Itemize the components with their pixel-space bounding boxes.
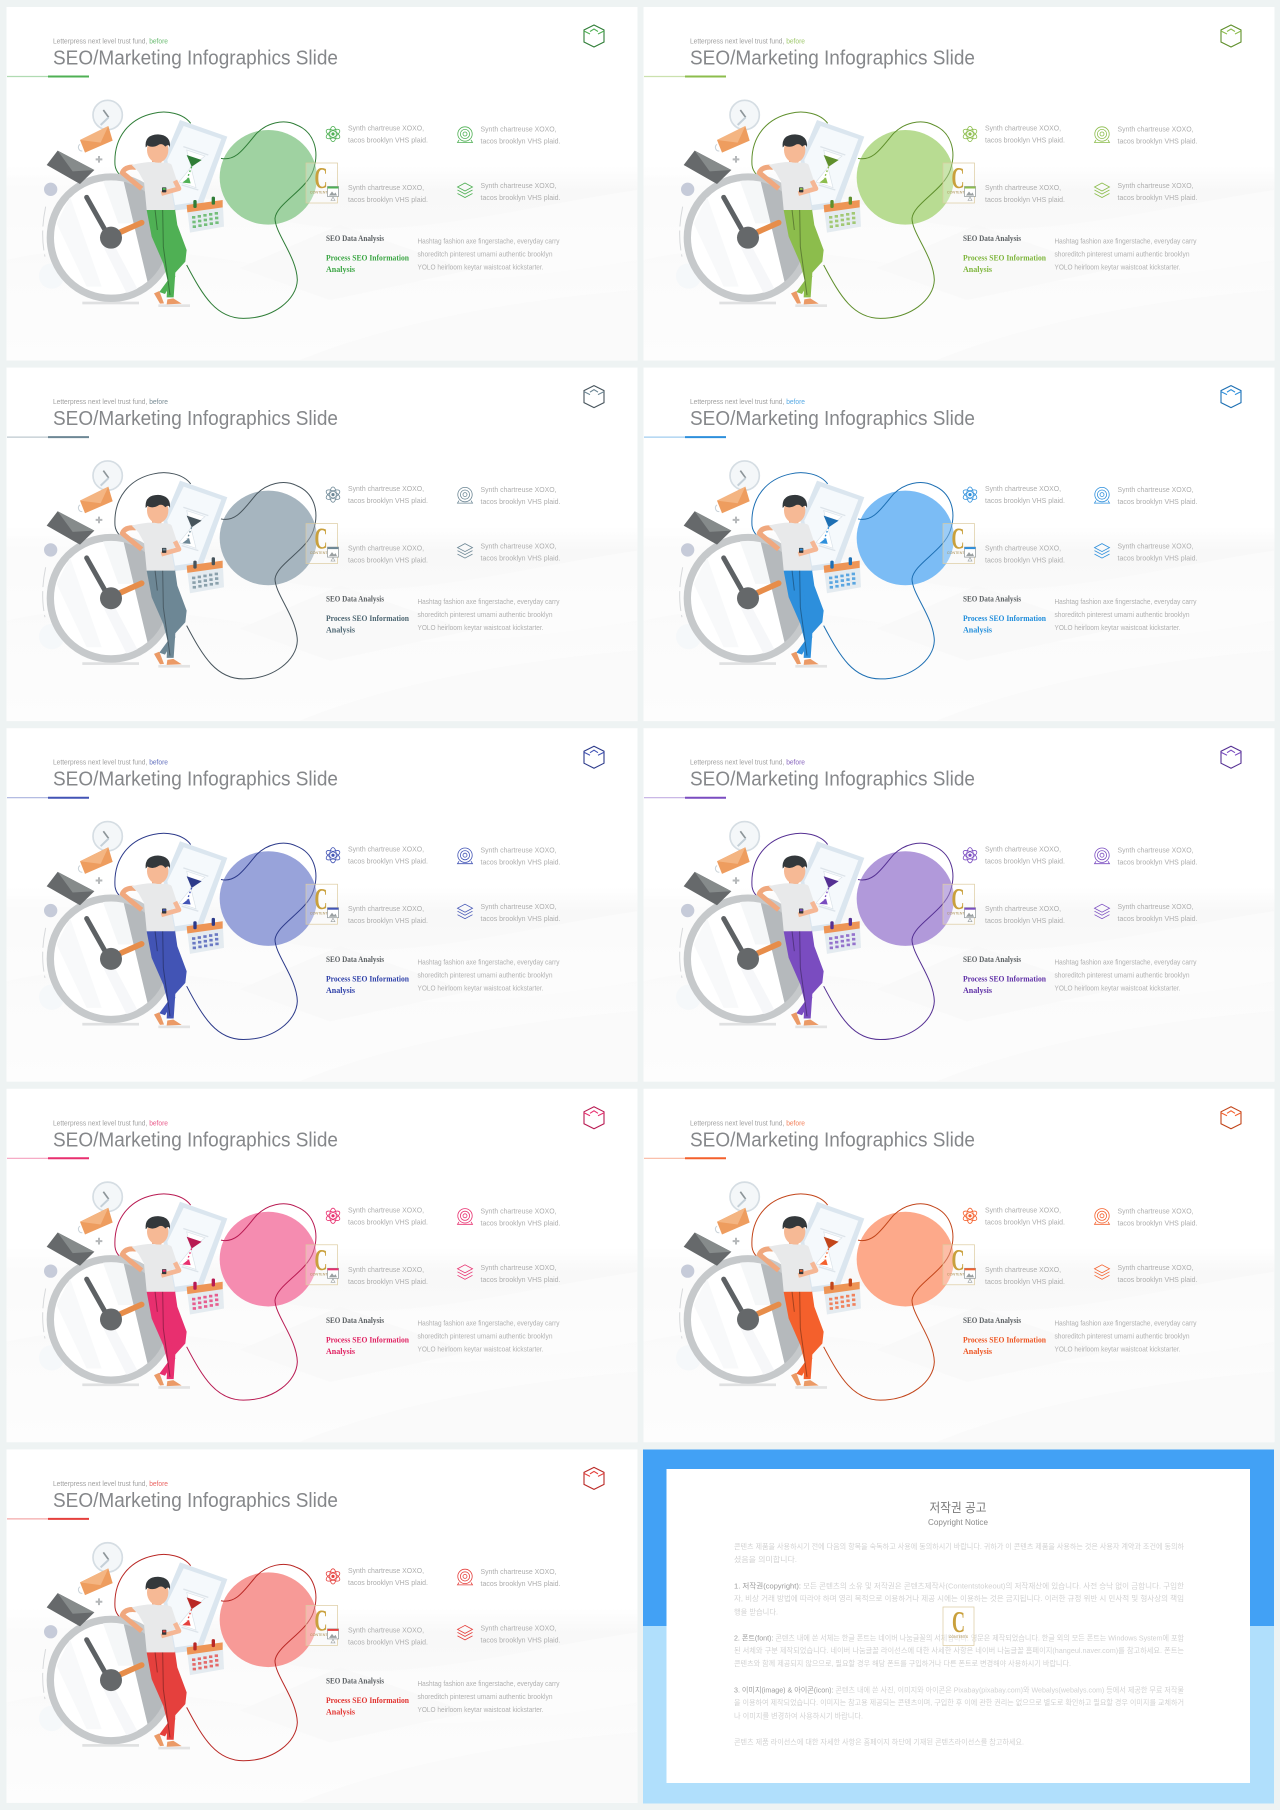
- watermark: [306, 881, 338, 924]
- heading: Process SEO Information: Analysis: [326, 986, 355, 995]
- eyebrow text: Letterpress next level trust fund, before: [690, 758, 805, 767]
- feature text 1: tacos brooklyn VHS plaid.: [348, 136, 428, 144]
- notice title: 저작권 공고: [930, 1501, 986, 1515]
- panel: lime slide: [644, 7, 1274, 360]
- watermark: C: [314, 881, 328, 916]
- heading: Process SEO Information: Analysis: [326, 626, 355, 635]
- feature text 4: Synth chartreuse XOXO,: [1118, 902, 1194, 911]
- title underline: [644, 1157, 726, 1159]
- feature text 4: tacos brooklyn VHS plaid.: [1118, 193, 1198, 202]
- paragraph: Hashtag fashion axe fingerstache, everyday carry: [418, 1318, 560, 1327]
- feature text 2: Synth chartreuse XOXO,: [480, 1206, 556, 1215]
- feature text 3: tacos brooklyn VHS plaid.: [348, 195, 428, 204]
- eyebrow text: Letterpress next level trust fund, before: [53, 397, 168, 406]
- heading: Process SEO Information: Process SEO Information: [326, 1696, 410, 1705]
- icon: atom: [325, 848, 341, 863]
- feature text 1: tacos brooklyn VHS plaid.: [985, 1217, 1065, 1226]
- icon: box logo: [584, 1467, 604, 1489]
- feature text 2: tacos brooklyn VHS plaid.: [480, 1218, 560, 1227]
- illustration: man with stopwatch: [676, 461, 954, 679]
- eyebrow text: Letterpress next level trust fund, before: [53, 758, 168, 767]
- watermark: CONTENTS: [310, 190, 331, 194]
- icon: image: [964, 547, 976, 561]
- panel: purple slide: [644, 728, 1274, 1082]
- title: SEO/Marketing Infographics Slide: [690, 1128, 975, 1151]
- feature text 1: Synth chartreuse XOXO,: [985, 124, 1061, 132]
- icon: image: [964, 186, 976, 200]
- watermark: C: [952, 1242, 964, 1277]
- icon: layers: [1094, 904, 1110, 919]
- icon: box logo: [584, 25, 604, 47]
- paragraph: Hashtag fashion axe fingerstache, everyday carry: [418, 958, 560, 967]
- watermark: CONTENTS: [947, 190, 968, 194]
- paragraph: shoreditch pinterest umami authentic brooklyn: [1054, 610, 1190, 619]
- paragraph: shoreditch pinterest umami authentic brooklyn: [1054, 250, 1190, 258]
- feature text 2: tacos brooklyn VHS plaid.: [480, 1579, 560, 1588]
- heading: Process SEO Information: Analysis: [963, 626, 992, 635]
- paragraph: shoreditch pinterest umami authentic brooklyn: [418, 971, 552, 980]
- icon: image: [328, 547, 338, 561]
- watermark: C: [314, 1602, 328, 1637]
- feature text 2: Synth chartreuse XOXO,: [1118, 846, 1194, 855]
- feature text 4: tacos brooklyn VHS plaid.: [480, 1635, 560, 1644]
- watermark: C: [952, 160, 964, 195]
- heading: Process SEO Information: Process SEO Information: [326, 614, 410, 623]
- icon: atom: [962, 487, 978, 502]
- paragraph: shoreditch pinterest umami authentic brooklyn: [418, 250, 552, 258]
- icon: target: [458, 848, 472, 864]
- watermark: [943, 1242, 974, 1285]
- title: SEO/Marketing Infographics Slide: [53, 46, 338, 70]
- illustration: man with stopwatch: [39, 461, 317, 679]
- heading: Process SEO Information: Analysis: [326, 265, 355, 274]
- title: SEO/Marketing Infographics Slide: [53, 768, 338, 791]
- watermark: [306, 1602, 338, 1645]
- icon: layers: [458, 1265, 472, 1279]
- panel: indigo slide: [6, 728, 638, 1082]
- panel: red slide: [6, 1449, 638, 1803]
- heading: Process SEO Information: Analysis: [963, 986, 992, 995]
- watermark: [306, 160, 338, 203]
- feature text 3: Synth chartreuse XOXO,: [348, 544, 424, 553]
- feature text 3: Synth chartreuse XOXO,: [348, 1265, 424, 1274]
- feature text 2: tacos brooklyn VHS plaid.: [480, 858, 560, 867]
- icon: atom: [325, 487, 341, 502]
- paragraph: Hashtag fashion axe fingerstache, everyday carry: [1054, 958, 1197, 967]
- heading: Process SEO Information: Analysis: [963, 1347, 992, 1356]
- icon: image: [964, 908, 976, 922]
- eyebrow text: Letterpress next level trust fund, before: [690, 397, 805, 406]
- watermark: CONTENTS: [310, 912, 331, 916]
- icon: layers: [1094, 544, 1110, 558]
- feature text 3: tacos brooklyn VHS plaid.: [985, 1277, 1065, 1286]
- watermark: [943, 160, 974, 203]
- heading: SEO Data Analysis: SEO Data Analysis: [326, 1316, 384, 1325]
- panel: copyright notice: [643, 1450, 1274, 1804]
- feature text 4: Synth chartreuse XOXO,: [480, 902, 556, 911]
- heading: SEO Data Analysis: SEO Data Analysis: [326, 955, 384, 964]
- icon: atom: [325, 1569, 341, 1584]
- paragraph: Hashtag fashion axe fingerstache, everyday carry: [1054, 597, 1197, 606]
- icon: box logo: [584, 1107, 604, 1129]
- heading: SEO Data Analysis: SEO Data Analysis: [963, 234, 1021, 243]
- feature text 1: tacos brooklyn VHS plaid.: [985, 136, 1065, 144]
- panel: blue slide: [644, 368, 1274, 721]
- feature text 1: Synth chartreuse XOXO,: [985, 1205, 1061, 1214]
- icon: image: [328, 1268, 338, 1282]
- icon: atom: [962, 1208, 978, 1223]
- heading: Process SEO Information: Process SEO Information: [963, 975, 1047, 984]
- paragraph: YOLO heirloom keytar waistcoat kickstarter.: [1054, 1344, 1180, 1353]
- feature text 1: tacos brooklyn VHS plaid.: [348, 1578, 428, 1587]
- feature text 3: Synth chartreuse XOXO,: [348, 1625, 424, 1634]
- watermark: C: [952, 521, 964, 556]
- notice section 1: 자, 비상 거래 방법에 따라야 하며 영리 목적으로 이용하거나 제공 시에는 이용하는 것은 금지됩니다. 이러한 규정 위반 시 민사적 및 형사상의 책임: [734, 1593, 1184, 1603]
- title underline: [7, 1518, 89, 1520]
- heading: Process SEO Information: Process SEO Information: [963, 614, 1047, 623]
- feature text 4: Synth chartreuse XOXO,: [480, 1263, 556, 1272]
- paragraph: Hashtag fashion axe fingerstache, everyday carry: [1054, 1318, 1197, 1327]
- heading: SEO Data Analysis: SEO Data Analysis: [963, 595, 1021, 604]
- feature text 3: Synth chartreuse XOXO,: [985, 1265, 1061, 1274]
- icon: atom: [325, 1208, 341, 1223]
- watermark: [943, 881, 974, 924]
- feature text 1: tacos brooklyn VHS plaid.: [985, 496, 1065, 505]
- heading: Process SEO Information: Process SEO Information: [326, 975, 410, 984]
- title underline: [7, 436, 89, 438]
- feature text 1: tacos brooklyn VHS plaid.: [348, 857, 428, 866]
- icon: image: [328, 186, 338, 200]
- paragraph: shoreditch pinterest umami authentic brooklyn: [418, 1331, 552, 1340]
- eyebrow text: Letterpress next level trust fund, before: [690, 36, 805, 46]
- feature text 3: tacos brooklyn VHS plaid.: [985, 916, 1065, 925]
- panel: pink slide: [6, 1089, 638, 1442]
- feature text 4: Synth chartreuse XOXO,: [480, 542, 556, 551]
- feature text 1: tacos brooklyn VHS plaid.: [985, 857, 1065, 866]
- feature text 2: Synth chartreuse XOXO,: [1118, 485, 1194, 494]
- icon: target: [458, 1569, 472, 1585]
- watermark: CONTENTS: [310, 1633, 331, 1637]
- feature text 3: tacos brooklyn VHS plaid.: [985, 556, 1065, 565]
- notice intro: 콘텐츠 제품을 사용하시기 전에 다음의 항목을 숙독하고 사용에 동의하시기 바랍니다. 귀하가 이 콘텐츠 제품을 사용하는 것은 사용자 계약과 조건에 동의하: [734, 1541, 1184, 1551]
- feature text 2: tacos brooklyn VHS plaid.: [480, 136, 560, 146]
- icon: layers: [458, 544, 472, 558]
- watermark: CONTENTS: [947, 1272, 968, 1276]
- heading: Process SEO Information: Process SEO Information: [326, 254, 410, 262]
- icon: layers: [458, 1625, 472, 1640]
- paragraph: YOLO heirloom keytar waistcoat kickstarter.: [1054, 984, 1180, 993]
- paragraph: YOLO heirloom keytar waistcoat kickstarter.: [418, 623, 544, 632]
- feature text 4: tacos brooklyn VHS plaid.: [480, 914, 560, 923]
- title underline: [644, 436, 726, 438]
- illustration: man with stopwatch: [676, 1182, 954, 1400]
- notice section 2: 2. 폰트(font): 콘텐츠 내에 쓴 서체는 한글 폰트는 네이버 나눔글꼴의 서체입니다. 영문은 제작되었습니다. 한글 외의 모든 폰트는 Windows System에 포함: [734, 1634, 1209, 1642]
- watermark: C: [952, 1604, 965, 1639]
- title underline: [7, 797, 89, 799]
- icon: target: [1094, 487, 1110, 503]
- illustration: man with stopwatch: [676, 822, 954, 1040]
- watermark: CONTENTS: [947, 551, 968, 555]
- feature text 2: tacos brooklyn VHS plaid.: [480, 497, 560, 506]
- watermark: [943, 1604, 974, 1646]
- notice section 2: 된 서체와 구분 제작되었습니다. 네이버 나눔글꼴 라이선스에 대한 사세한 사항은 네이버 나눔글꼴 홈페이지(hangeul.naver.com)를 참고하세요. 폰트는: [734, 1645, 1184, 1655]
- feature text 3: Synth chartreuse XOXO,: [985, 904, 1061, 913]
- notice section 2: 콘텐츠와 함께 제공되지 않으므로, 필요할 경우 해당 폰트를 구입하거나 다른 폰트로 변경해야 사용하시기 바랍니다.: [734, 1658, 1071, 1668]
- feature text 4: Synth chartreuse XOXO,: [1118, 542, 1194, 551]
- eyebrow text: Letterpress next level trust fund, before: [53, 36, 168, 46]
- panel: slate slide: [6, 368, 638, 721]
- icon: box logo: [1221, 746, 1241, 768]
- feature text 3: tacos brooklyn VHS plaid.: [348, 1637, 428, 1646]
- eyebrow text: Letterpress next level trust fund, before: [53, 1118, 168, 1127]
- paragraph: shoreditch pinterest umami authentic brooklyn: [1054, 971, 1190, 980]
- feature text 1: tacos brooklyn VHS plaid.: [348, 1217, 428, 1226]
- paragraph: YOLO heirloom keytar waistcoat kickstarter.: [418, 984, 544, 993]
- watermark: [943, 521, 974, 564]
- icon: target: [458, 127, 472, 142]
- eyebrow text: Letterpress next level trust fund, before: [53, 1479, 168, 1488]
- feature text 3: tacos brooklyn VHS plaid.: [985, 195, 1065, 204]
- feature text 4: Synth chartreuse XOXO,: [480, 181, 556, 190]
- notice section 3: 을 이용하여 제작되었습니다. 이미지는 참고용 제공되는 콘텐츠이며, 구입한 후 이에 관한 권리는 없으므로 별도로 확인하고 필요할 경우 이미지를 교체하거: [734, 1697, 1184, 1707]
- paragraph: shoreditch pinterest umami authentic brooklyn: [418, 610, 552, 619]
- feature text 4: Synth chartreuse XOXO,: [1118, 1263, 1194, 1272]
- heading: Process SEO Information: Analysis: [326, 1347, 355, 1356]
- feature text 1: Synth chartreuse XOXO,: [348, 124, 424, 132]
- paragraph: YOLO heirloom keytar waistcoat kickstarter.: [418, 1705, 544, 1714]
- title: SEO/Marketing Infographics Slide: [690, 407, 975, 430]
- watermark: CONTENTS: [949, 1635, 969, 1639]
- eyebrow text: Letterpress next level trust fund, before: [690, 1118, 805, 1127]
- feature text 4: tacos brooklyn VHS plaid.: [480, 554, 560, 563]
- title: SEO/Marketing Infographics Slide: [53, 407, 338, 430]
- feature text 1: Synth chartreuse XOXO,: [985, 845, 1061, 854]
- illustration: man with stopwatch: [39, 100, 317, 318]
- feature text 3: Synth chartreuse XOXO,: [348, 904, 424, 913]
- feature text 4: tacos brooklyn VHS plaid.: [480, 1275, 560, 1284]
- heading: Process SEO Information: Process SEO Information: [963, 254, 1047, 262]
- title underline: [7, 1157, 89, 1159]
- notice subtitle: Copyright Notice: [928, 1518, 989, 1527]
- watermark: [306, 521, 338, 564]
- watermark: [306, 1242, 338, 1285]
- feature text 1: Synth chartreuse XOXO,: [348, 484, 424, 493]
- paragraph: Hashtag fashion axe fingerstache, everyday carry: [1054, 236, 1197, 246]
- illustration: man with stopwatch: [676, 100, 954, 318]
- watermark: C: [314, 160, 328, 195]
- notice section 1: 1. 저작권(copyright): 모든 콘텐츠의 소유 및 저작권은 콘텐츠제작사(Contentstokeout)의 저작재산에 있습니다. 사전 승낙 없이 금합니다. 구입한: [734, 1582, 1182, 1590]
- paragraph: Hashtag fashion axe fingerstache, everyday carry: [418, 1679, 560, 1688]
- feature text 1: Synth chartreuse XOXO,: [348, 1205, 424, 1214]
- feature text 2: tacos brooklyn VHS plaid.: [1118, 1218, 1198, 1227]
- feature text 3: Synth chartreuse XOXO,: [985, 544, 1061, 553]
- panel: green slide: [6, 7, 638, 360]
- paragraph: YOLO heirloom keytar waistcoat kickstarter.: [418, 1344, 544, 1353]
- feature text 4: tacos brooklyn VHS plaid.: [1118, 914, 1198, 923]
- heading: Process SEO Information: Process SEO Information: [963, 1335, 1047, 1344]
- feature text 1: tacos brooklyn VHS plaid.: [348, 496, 428, 505]
- heading: Process SEO Information: Process SEO Information: [326, 1335, 410, 1344]
- icon: layers: [458, 904, 472, 919]
- heading: SEO Data Analysis: SEO Data Analysis: [963, 955, 1021, 964]
- feature text 3: tacos brooklyn VHS plaid.: [348, 1277, 428, 1286]
- feature text 3: tacos brooklyn VHS plaid.: [348, 916, 428, 925]
- icon: image: [328, 908, 338, 922]
- feature text 1: Synth chartreuse XOXO,: [348, 1566, 424, 1575]
- feature text 2: Synth chartreuse XOXO,: [480, 124, 556, 134]
- paragraph: YOLO heirloom keytar waistcoat kickstarter.: [1054, 623, 1180, 632]
- feature text 1: Synth chartreuse XOXO,: [348, 845, 424, 854]
- feature text 4: tacos brooklyn VHS plaid.: [1118, 554, 1198, 563]
- icon: atom: [325, 126, 341, 142]
- icon: box logo: [1221, 25, 1241, 47]
- paragraph: Hashtag fashion axe fingerstache, everyday carry: [418, 597, 560, 606]
- feature text 2: tacos brooklyn VHS plaid.: [1118, 858, 1198, 867]
- watermark: CONTENTS: [310, 1272, 331, 1276]
- heading: SEO Data Analysis: SEO Data Analysis: [326, 595, 384, 604]
- title underline: [644, 797, 726, 799]
- panel: orange slide: [644, 1089, 1274, 1442]
- icon: layers: [458, 183, 472, 198]
- icon: target: [1094, 127, 1110, 142]
- illustration: man with stopwatch: [39, 822, 317, 1040]
- feature text 2: Synth chartreuse XOXO,: [1118, 124, 1194, 134]
- paragraph: YOLO heirloom keytar waistcoat kickstarter.: [418, 262, 544, 272]
- feature text 2: Synth chartreuse XOXO,: [480, 1567, 556, 1576]
- heading: SEO Data Analysis: SEO Data Analysis: [326, 1676, 384, 1685]
- notice footer: 콘텐츠 제품 라이선스에 대한 자세한 사항은 홈페이지 하단에 기재된 콘텐츠라이선스를 참고하세요.: [734, 1736, 1024, 1746]
- feature text 4: Synth chartreuse XOXO,: [1118, 181, 1194, 190]
- feature text 2: tacos brooklyn VHS plaid.: [1118, 497, 1198, 506]
- icon: box logo: [584, 386, 604, 408]
- title underline: [7, 76, 89, 78]
- heading: Process SEO Information: Analysis: [326, 1707, 355, 1716]
- icon: layers: [1094, 1265, 1110, 1279]
- feature text 2: tacos brooklyn VHS plaid.: [1118, 136, 1198, 146]
- icon: target: [458, 487, 472, 503]
- title: SEO/Marketing Infographics Slide: [53, 1489, 338, 1512]
- title: SEO/Marketing Infographics Slide: [690, 768, 975, 791]
- feature text 2: Synth chartreuse XOXO,: [480, 846, 556, 855]
- feature text 4: tacos brooklyn VHS plaid.: [1118, 1275, 1198, 1284]
- paragraph: Hashtag fashion axe fingerstache, everyday carry: [418, 236, 560, 246]
- watermark: C: [314, 521, 328, 556]
- heading: Process SEO Information: Analysis: [963, 265, 992, 274]
- feature text 3: Synth chartreuse XOXO,: [985, 183, 1061, 192]
- watermark: CONTENTS: [947, 912, 968, 916]
- notice section 3: 나 이미지를 변경하여 사용하시기 바랍니다.: [734, 1710, 863, 1720]
- paragraph: YOLO heirloom keytar waistcoat kickstarter.: [1054, 262, 1180, 272]
- icon: box logo: [1221, 1107, 1241, 1129]
- title: SEO/Marketing Infographics Slide: [690, 46, 975, 70]
- illustration: man with stopwatch: [39, 1182, 317, 1400]
- icon: box logo: [1221, 386, 1241, 408]
- paragraph: shoreditch pinterest umami authentic brooklyn: [418, 1692, 552, 1701]
- feature text 4: Synth chartreuse XOXO,: [480, 1623, 556, 1632]
- title: SEO/Marketing Infographics Slide: [53, 1128, 338, 1151]
- icon: target: [1094, 848, 1110, 864]
- watermark: C: [952, 881, 964, 916]
- icon: image: [328, 1629, 338, 1643]
- icon: image: [964, 1268, 976, 1282]
- feature text 2: Synth chartreuse XOXO,: [480, 485, 556, 494]
- notice section 3: 3. 이미지(image) & 아이콘(icon): 콘텐츠 내에 쓴 사진, 이미지와 아이콘은 Pixabay(pixabay.com)와 Webalys(webalys.com) 등에서 제공한 무료 저작물: [734, 1686, 1204, 1694]
- icon: atom: [962, 848, 978, 863]
- watermark: C: [314, 1242, 328, 1277]
- notice section 1: 행을 받습니다.: [734, 1606, 778, 1616]
- icon: atom: [962, 126, 978, 142]
- watermark: CONTENTS: [310, 551, 331, 555]
- notice intro: 셨음을 의미합니다.: [734, 1554, 797, 1564]
- feature text 3: Synth chartreuse XOXO,: [348, 183, 424, 192]
- icon: box logo: [584, 746, 604, 768]
- feature text 4: tacos brooklyn VHS plaid.: [480, 193, 560, 202]
- heading: SEO Data Analysis: SEO Data Analysis: [326, 234, 384, 243]
- paragraph: shoreditch pinterest umami authentic brooklyn: [1054, 1331, 1190, 1340]
- feature text 3: tacos brooklyn VHS plaid.: [348, 556, 428, 565]
- illustration: man with stopwatch: [39, 1543, 317, 1761]
- icon: target: [458, 1209, 472, 1224]
- feature text 2: Synth chartreuse XOXO,: [1118, 1206, 1194, 1215]
- heading: SEO Data Analysis: SEO Data Analysis: [963, 1316, 1021, 1325]
- icon: target: [1094, 1209, 1110, 1224]
- title underline: [644, 76, 726, 78]
- icon: layers: [1094, 183, 1110, 198]
- feature text 1: Synth chartreuse XOXO,: [985, 484, 1061, 493]
